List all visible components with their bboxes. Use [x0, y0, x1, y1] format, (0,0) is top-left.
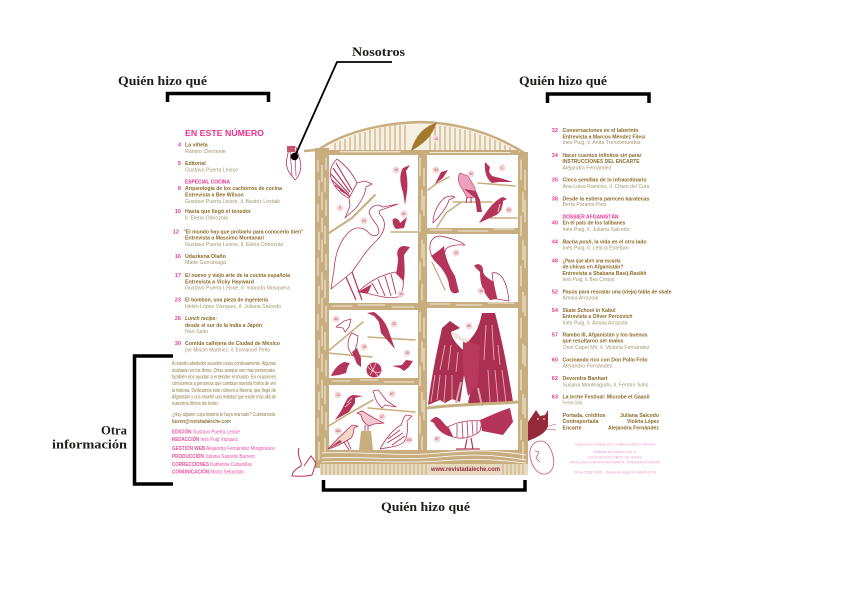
entry: page 34: Hacer cuentos infinitos sin parar — [562, 153, 642, 159]
entry: page 4: Ramiro Clemente — [185, 149, 226, 155]
bird: white — [433, 196, 460, 227]
entry: page 32: 32 — [552, 128, 558, 134]
entry: page 26: Lunch recipe: — [185, 316, 217, 322]
bird: toucan — [430, 236, 465, 293]
number badges: 164 — [335, 429, 341, 433]
entry: page 17: 17 — [175, 273, 181, 279]
annotation: left top bracket — [168, 94, 268, 102]
text block: credits: GESTIÓN WEB Alejandra Fernández Mingorance — [172, 444, 275, 452]
entry: especial cocina page 8 — [178, 180, 283, 205]
text block: intro paragraph: la historia. Dedicamos este número a Meena, que llegó de — [172, 388, 276, 394]
illustration: birds in the window — [327, 122, 518, 450]
entry: page 48: Inés Puig, il. Bea Crespo — [562, 277, 614, 283]
bird: brown top — [411, 122, 437, 151]
entry: especial cocina page 8: Entrevista a Bee Wilson — [185, 192, 244, 198]
number badges: 67 — [390, 392, 394, 396]
entry: page 34: INSTRUCCIONES DEL ENCARTE — [562, 159, 640, 165]
entry: page 5: Gustavo Puerta Leisse — [185, 168, 238, 174]
entry: page 23: Helen López Vázquez, il. Juliana Salcedo — [185, 304, 281, 310]
entry: page 16: Udazkena Olaño — [185, 254, 227, 260]
number badges: 54 — [434, 168, 438, 172]
bird: small branch — [428, 170, 449, 190]
entry: page 38 — [552, 196, 650, 208]
entry: page 52: Amaia Arrazola — [562, 296, 599, 302]
entry: page 10 — [175, 209, 252, 222]
entry: page 12: Gustavo Puerta Leisse, il. Elena Odriozola — [185, 242, 284, 248]
entry: page 32 — [552, 128, 646, 146]
bird: robin on twig — [368, 390, 415, 412]
entry: page 35 — [552, 177, 650, 190]
entry: page 62: 62 — [552, 376, 558, 382]
heading: en este número: EN ESTE NÚMERO — [185, 127, 264, 138]
number badges: 104 — [406, 438, 412, 442]
number badges: C — [501, 166, 504, 170]
annotation: bottom quién hizo qué label: Quién hizo qué — [381, 500, 470, 514]
entry: page 63: 63 — [552, 395, 558, 401]
entry: page 38: Berta Páramo Pino — [562, 202, 606, 208]
entry: page 54: 54 — [552, 308, 559, 314]
entry: page 57 — [552, 333, 650, 351]
entry: page 23 — [175, 298, 281, 310]
number badges: 62 — [507, 208, 511, 212]
illustration: cat — [528, 410, 556, 441]
annotation: otra información label: información — [52, 438, 127, 452]
entry: page 38: Desde la estiera parecen karatecas — [562, 196, 650, 202]
panel: left contents column — [173, 127, 304, 354]
entry: page 16: 16 — [175, 254, 181, 260]
number badges: 13 — [454, 251, 458, 255]
entry: page 32: Entrevista a Marcos Méndez Filesi — [562, 134, 646, 140]
entry: page 26: Nao Saito — [185, 329, 208, 335]
text block: cover credits — [562, 413, 660, 431]
number badges: 18 — [394, 168, 398, 172]
entry: page 26: 26 — [175, 316, 181, 322]
entry: page 57: Oriol Capel Mir, il. Victoria Fernández — [562, 345, 650, 351]
entry: page 52: Pasos para rescatar una (vieja) tabla de skate — [562, 290, 672, 296]
entry: page 16: Maite Gurrutxaga — [185, 260, 227, 266]
entry: especial cocina page 8: ESPECIAL COCINA — [185, 180, 230, 186]
text block: intro paragraph: también nos ayudan a entender el mundo. En ocasiones — [172, 374, 276, 380]
entry: page 12 — [173, 230, 304, 248]
entry: page 52: 52 — [552, 290, 558, 296]
entry: page 17 — [175, 273, 291, 292]
bird: lower shelf pair — [331, 360, 413, 378]
text block: cover credits: Violeta López — [627, 419, 659, 425]
entry: page 54: Inés Puig, il. Amaia Arrazola — [562, 320, 628, 326]
annotation: nosotros label: Nosotros — [352, 45, 405, 59]
entry: dossier page 40: En el país de los talibanes — [562, 221, 626, 227]
bird: lower left small — [327, 319, 363, 352]
entry: page 26: desde el sur de la India a Japón — [185, 323, 263, 329]
entry: page 54: Skate School in Kabul — [562, 308, 616, 314]
entry: page 23: El bombón, una pieza de ingeniería — [185, 298, 269, 304]
entry: page 30 — [175, 341, 281, 354]
entry: page 23: 23 — [175, 298, 181, 304]
entry: page 32: Inés Puig, il. Anita Trenzomundos — [562, 140, 641, 146]
entry: page 63: Fermín Solís — [562, 401, 583, 407]
text block: credits: COMUNICACIÓN Marta Sebastián — [172, 468, 244, 476]
entry: dossier page 40: Inés Puig, il. Juliana Salcedo — [562, 227, 630, 233]
entry: page 60 — [552, 357, 648, 370]
panel: right contents column — [552, 128, 672, 474]
text block: credits: CORRECCIONES Katherine Cabanillas — [172, 462, 252, 468]
entry: dossier page 40: 40 — [552, 221, 558, 227]
annotation: left quién hizo qué label: Quién hizo qué — [118, 74, 207, 88]
bird: grey with long tail — [327, 333, 372, 367]
entry: page 48 — [552, 259, 647, 283]
illustration: egg — [530, 441, 554, 474]
number badges: 44 — [334, 317, 338, 321]
number badges: 23 — [392, 322, 396, 326]
entry: page 10: Il. Elena Odriozola — [185, 216, 229, 222]
bird: crimson duck — [474, 264, 509, 301]
text block: imprint: ISSN 2386-5458 - Depósito legal M-34645-2014 — [574, 470, 656, 474]
entry: page 57: Rambo III, Afganistán y los buenos — [562, 333, 648, 339]
entry: page 17: Entrevista a Vicky Hayward — [185, 280, 255, 286]
entry: dossier page 40: DOSSIER AFGANISTÁN — [562, 214, 618, 221]
entry: dossier page 40 — [552, 214, 630, 233]
entry: page 44 — [552, 240, 647, 252]
text block: imprint: Editada en Madrid por la — [594, 450, 638, 454]
text block: imprint: Impreso en Hakkuçer Gráficas Brizzi, Madrid — [574, 442, 656, 446]
annotation: otra información label — [52, 424, 128, 452]
bird: pink — [453, 173, 492, 212]
entry: especial cocina page 8: Arqueología de los cachorros de cocina — [185, 186, 283, 192]
bird: eagle — [428, 313, 513, 406]
entry: page 54 — [552, 308, 633, 326]
number badges: 15 — [405, 351, 409, 355]
text block: cover credits: Alejandra Fernández — [608, 425, 659, 431]
number badges — [332, 135, 513, 444]
bird: egret legs — [346, 272, 362, 300]
text block: credits: EDICIÓN Gustavo Puerta Leisse — [172, 428, 240, 436]
entry: page 34: 34 — [552, 153, 559, 159]
entry: page 35: Cinco semillas de lo infraordinario — [562, 177, 647, 183]
text block: cover credits: Encarte — [562, 425, 582, 431]
number badges: 67 — [435, 437, 439, 441]
entry: page 57: 57 — [552, 333, 558, 339]
number badges: 66 — [467, 324, 471, 328]
text block: intro paragraph: nuestros libros de texto. — [172, 401, 219, 407]
number badges: 61 — [402, 212, 406, 216]
entry: page 30: Comida callejera de Ciudad de México — [185, 341, 281, 347]
text block: cover credits: Contraportada — [562, 419, 599, 425]
entry: page 10: Hasta que llegó el tenedor — [185, 209, 252, 215]
bird: mottled red — [479, 197, 517, 223]
text block: intro paragraph: conocemos a personas que cambian nuestra forma de ver — [172, 381, 276, 387]
annotation: left side bracket — [134, 356, 173, 484]
bird: streaked finch — [328, 425, 358, 450]
text block: credits — [172, 428, 275, 476]
number badges: 19 — [479, 289, 483, 293]
entry: page 4: La viñeta — [185, 142, 209, 148]
text block: imprint — [570, 442, 661, 474]
entry: especial cocina page 8: Gustavo Puerta Leisse, il. Beatriz Lostalé — [185, 199, 280, 205]
entry: page 32: Conversaciones en el laberinto — [562, 128, 639, 134]
entry: page 44: 44 — [552, 240, 559, 246]
entry: page 48: 48 — [552, 259, 558, 265]
entry: page 44: Inés Puig, il. Leticia Esteban — [562, 246, 628, 252]
text block: credits: PRODUCCIÓN Juliana Salcedo Barrero — [172, 452, 255, 460]
number badges: 15 — [362, 345, 366, 349]
entry: page 35: Ana-Luisa Ramírez, il. Charo del Cura — [562, 184, 650, 190]
illustration: hanging bat — [286, 146, 301, 180]
entry: page 30: 30 — [175, 341, 181, 347]
text block: intro paragraph: acabarán en los libros. Otras aunque son más personales, — [172, 368, 276, 374]
entry: page 48: ¿Para qué abrir una escuela — [562, 259, 621, 265]
bird: dove with fan wing — [329, 159, 375, 233]
bird: crimson shrike — [367, 312, 415, 349]
number badges: 10 — [434, 137, 438, 141]
entry: page 34 — [552, 153, 642, 172]
entry: page 34: Alejandra Fernández — [562, 166, 612, 172]
entry: page 4 — [178, 142, 226, 155]
number badges: 57 — [380, 415, 384, 419]
number badges: 9 — [339, 206, 341, 210]
entry: page 38: 38 — [552, 196, 558, 202]
entry: page 16 — [175, 254, 227, 266]
entry: page 62: Susana Monteagudo, il. Fermín Solís — [562, 382, 649, 388]
entry: page 62 — [552, 376, 649, 388]
entry: page 60: 60 — [552, 357, 558, 363]
entry: page 4: 4 — [178, 142, 182, 148]
annotation: right top bracket — [548, 94, 649, 103]
text block: cover credits: Juliana Salcedo — [620, 413, 660, 419]
bird: kingfisher — [327, 395, 373, 427]
entry: page 63: La leche Festival: Microbe et Gaasil — [562, 395, 650, 401]
bird: red crested — [478, 162, 515, 186]
bird: on pedestal — [357, 411, 384, 450]
entry: page 52 — [552, 290, 672, 302]
entry: page 62: Devendra Banhart — [562, 376, 608, 382]
text block: imprint: ASOCIACIÓN LIBRE DE IDEAS — [588, 454, 643, 460]
entry: page 60: Alejandro Fernández — [562, 364, 613, 370]
annotation: right quién hizo qué label: Quién hizo qué — [519, 74, 607, 88]
entry: page 30: por Miriam Martínez, il. Enmanuel Peña — [185, 348, 271, 354]
entry: page 54: Entrevista a Oliver Percovich — [562, 314, 633, 320]
number badges: 16 — [399, 292, 403, 296]
entry: page 26 — [175, 316, 263, 335]
entry: page 63 — [552, 395, 650, 407]
entry: page 10: 10 — [175, 209, 181, 215]
bird: large partridge — [380, 415, 412, 449]
annotation: nosotros leader line — [291, 62, 392, 160]
entry: page 57: que resultaron ser malos — [562, 339, 624, 345]
entry: page 5: Editorial — [185, 161, 206, 167]
entry: page 48: de chicas en Afganistán? — [562, 265, 624, 271]
text block: intro paragraph: A nuestro alrededor suceden cosas continuamente. Algunas — [172, 361, 276, 367]
text block: intro paragraph: Afganistán y nos enseñó una realidad que existe más allá de — [172, 395, 276, 401]
number badges: 30 — [469, 172, 473, 176]
text block: intro paragraph: buzon@revistadaleche.com — [172, 419, 231, 425]
branch under eagle — [427, 402, 518, 408]
bird: egret — [331, 204, 398, 289]
text block: imprint: PARA UNA LITERATURA INFANTIL TRANSFRONTERIZA — [570, 460, 661, 464]
entry: page 44: Bacha posh, la vida en el otro lado — [562, 240, 647, 246]
entry: page 60: Cocinando rico con Don Pollo Frito — [562, 357, 648, 363]
illustration: window frame — [304, 122, 528, 475]
entry: page 5 — [178, 161, 238, 174]
text block: credits: REDACCIÓN Inés Puig Vázquez — [172, 435, 238, 443]
entry: page 12: "El mundo hay que probarlo para conocerlo bien" — [184, 230, 304, 236]
text block: intro paragraph — [172, 361, 276, 425]
number badges: 12 — [336, 393, 340, 397]
annotation: bottom bracket — [324, 480, 525, 490]
entry: page 5: 5 — [178, 161, 181, 167]
entry: page 12: Entrevista a Massimo Montanari — [185, 236, 264, 242]
illustration: mouse — [292, 448, 316, 476]
number badges: 24 — [362, 219, 366, 223]
entry: page 17: Gustavo Puerta Leisse, il. Yolanda Mosquera — [185, 286, 291, 292]
bird: turkey — [430, 408, 513, 449]
entry: page 35: 35 — [552, 177, 558, 183]
entry: page 17: El nuevo y viejo arte de la cocina española — [185, 273, 291, 279]
annotation: otra información label: Otra — [101, 424, 128, 438]
entry: page 48: Entrevista a Shabana Basij-Rasikh — [562, 271, 647, 277]
entry: page 12: 12 — [173, 230, 179, 236]
text block: cover credits: Portada, créditos — [562, 413, 606, 419]
text: website url: www.revistadaleche.com — [430, 466, 501, 473]
bird: goose — [358, 246, 410, 298]
text block: intro paragraph: ¿Hay alguien cuya historia te haya marcado? Cuéntanoslo: — [172, 412, 276, 418]
bird: woodpecker — [391, 165, 418, 232]
entry: especial cocina page 8: 8 — [178, 186, 181, 192]
